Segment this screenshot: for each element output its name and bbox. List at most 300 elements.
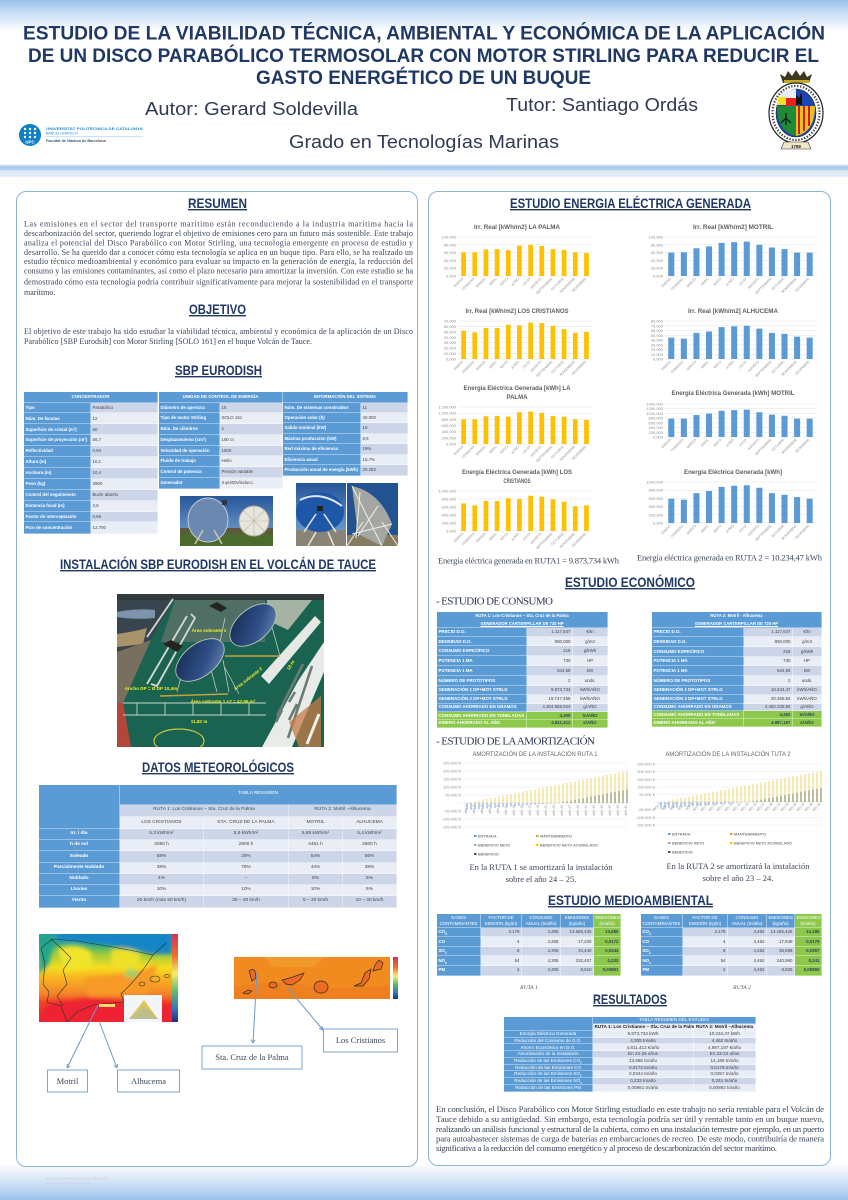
arrow: to Alhucema [98,1020,117,1068]
table: datos meteorologicos: STA. CRUZ DE LA PALMA [217,820,275,825]
arrow: to Los Cristianos [286,986,322,1030]
chart: Irr. Real Alhucema [650,308,816,378]
table: datos meteorologicos: 5% [366,876,373,881]
chart: Energia electrica Los Cristianos: ABRIL [488,531,497,541]
table: datos meteorologicos: 4% [158,876,165,881]
chart: amortizacion ruta 1: -150.000 € [441,824,461,829]
table: concentrador: 10,4 [92,470,101,475]
table: informacion del sistema: 11 [362,404,367,410]
chart: Energia electrica La Palma: 200,000 [441,435,456,440]
table: emisiones ruta 2: EMISIÓN (kg/tn) [689,920,721,926]
chart: amortizacion ruta 1: año 27 [568,804,572,815]
table: resumen de resultados: RUTA 2: Motril –Alhucema [696,1024,753,1029]
table: concentrador: 10,1 [92,459,101,464]
chart: Irr. Real Alhucema: OCTUBRE [770,359,785,374]
table: consumo ruta 2: kW [804,668,810,673]
table: resumen de resultados: Reducción del Consumo de D.O. [514,1038,582,1043]
chart: Energia electrica Motril: ABRIL [699,437,709,447]
chart: Irr. Real Alhucema: ABRIL [699,359,709,369]
chart: Energia electrica La Palma: ENERO [452,444,464,456]
text: conclusion: Tauce debido a su antigüedad. Sin embargo, esta tecnología podría ser útil y rentable tanto en un buque nuevo, [436,1114,824,1124]
chart: amortizacion ruta 2: -100.000 € [635,814,655,819]
table: emisiones ruta 2: 0,0357 [806,948,820,953]
table: consumo ruta 1: 2 [568,678,570,683]
table: datos meteorologicos: 4451 h [308,842,323,847]
chart: amortizacion ruta 2: año 21 [731,801,741,812]
table: emisiones ruta 2: 14.185,426 [771,929,792,934]
callout: Los Cristianos: Los Cristianos [335,1034,385,1044]
table: consumo ruta 1: kWh/AÑO [580,687,600,692]
chart: amortizacion ruta 1: año 33 [592,804,596,815]
table: emisiones ruta 2: EMISIONES [768,915,793,920]
chart: Irr. Real Los Cristianos: 60,000 [443,323,456,328]
table: concentrador: 0,96 [92,514,101,519]
chart: Irr. Real La Palma: ENERO [452,276,464,288]
table: emisiones ruta 2: PM [642,967,649,972]
callout: Alhucema: Alhucema [131,1076,166,1086]
table: datos meteorologicos: MOTRIL [306,820,325,825]
table: resumen de resultados: 0,0357 tn/año [710,1071,739,1076]
table: datos meteorologicos: 10% [241,887,251,892]
chart: Irr. Real Alhucema: ENERO [660,359,672,371]
table: consumo ruta 2: GENERADOR CARTERPILLAR DE 730 HP [695,621,778,626]
subheading: estudio de consumo: - ESTUDIO DE CONSUMO [436,595,553,607]
table: consumo ruta 2: tn/AÑO [799,712,815,717]
chart: Irr. Real Los Cristianos: 20,000 [443,345,456,350]
chart: Energia electrica Alhucema: ABRIL [699,523,709,533]
photo: blue dish front [296,482,346,546]
table: consumo ruta 1: €/tn [586,629,594,634]
chart: Energia electrica La Palma: 0,000 [445,441,456,446]
table: consumo ruta 2: unds. [802,678,812,683]
table: emisiones ruta 2: (tn/año) [800,920,816,926]
table: consumo ruta 2: 730 [783,658,790,663]
chart: Irr. Real Motril: MAYO [712,276,722,286]
text: resumen: demostrado cómo esta tecnología podría contribuir significativamente para mejorar la sostenibilidad en el transporte [24,277,413,286]
chart: amortizacion ruta 1: -100.000 € [441,816,461,821]
table: informacion del sistema [283,392,408,476]
chart: Irr. Real Motril: FEBRERO [670,276,684,291]
table: informacion del sistema: INFORMACIÓN DEL SISTEMA [314,394,376,399]
text: resumen: desarrollo. Se ha querido dar a conocer cómo esta tecnología se aplica en un buque tipo. Para ello, se ha realizado un [24,248,412,256]
chart: amortizacion ruta 1: BENEFICIO NETO ACUMULADO [540,843,598,847]
table: emisiones ruta 1: (kg/año) [569,920,585,926]
chart: amortizacion ruta 1: año 13 [512,804,516,815]
table: emisiones ruta 2: NOx [642,958,651,965]
table: concentrador: Altura (m) [26,459,46,464]
table: resumen de resultados: TABLA RESUMEN DEL ESTUDIO [639,1017,709,1022]
chart: Irr. Real Los Cristianos: 70,000 [443,318,456,323]
table: resumen de resultados: Amortización de la Instalación [517,1051,579,1056]
table: consumo ruta 2: 4,462 [780,712,790,717]
table: concentrador: CONCENTRADOR [72,394,109,399]
chart: amortizacion ruta 1: año 7 [488,804,492,813]
chart: Energia electrica La Palma: MARZO [475,444,486,456]
table: concentrador [24,392,158,534]
table: datos meteorologicos: – [245,876,247,881]
table: datos meteorologicos: 44% [311,865,320,870]
table: concentrador: 3960 [92,481,102,486]
table: emisiones ruta 1: SO2 [438,948,447,955]
chart: amortizacion ruta 1: año 25 [560,804,564,815]
icon: UPC logo: Facultat de Nàutica de Barcelona [46,139,107,143]
table: unidad de control de energia: 2 [222,426,224,431]
table: emisiones ruta 2: 0,0179 [806,939,820,944]
chart: Irr. Real Motril: 40,000 [650,257,663,262]
chart: Irr. Real La Palma: MARZO [475,276,486,288]
text: amortizacion ruta 2 [666,860,810,882]
author: Autor: Gerard Soldevilla [145,99,359,119]
table: emisiones ruta 1: EMISIONES [565,915,589,920]
table: emisiones ruta 1: 17,220 [578,939,592,944]
table: emisiones ruta 2: 0,241 [808,958,820,963]
table: consumo ruta 1: 850,000 [555,638,570,644]
chart: amortizacion ruta 1: año 1 [464,804,468,813]
table: datos meteorologicos: 5,88 kWh/m² [302,831,329,836]
chart: amortizacion ruta 2: año 11 [691,801,701,811]
map: Iberian peninsula irradiation [38,930,178,1022]
chart: Energia electrica Motril: NOVIEMBRE [780,437,798,455]
chart: Energia electrica Motril: 400,000 [648,425,663,430]
chart: Energia electrica Motril: AGOSTO [747,437,760,450]
chart: Irr. Real Alhucema: 60,000 [650,328,663,332]
table: consumo ruta 1: RUTA 1: Los Cristianos – Sta. Cruz de la Palma [475,613,569,618]
chart: Energia electrica La Palma: 600,000 [441,422,456,428]
text: objetivo [24,326,412,346]
table: datos meteorologicos: Lluvias [71,887,87,892]
heading: resultados: RESULTADOS [592,990,666,1006]
chart: Energia electrica Alhucema: NOVIEMBRE [780,523,798,541]
table: unidad de control de energia: Helio [222,458,232,463]
table: resumen de resultados: 4.811,412 €/año [627,1044,659,1050]
table: datos meteorologicos: TABLA RESUMEN [238,791,278,796]
chart: Energia electrica Motril: MARZO [685,437,697,449]
table: resumen de resultados: 4.987,197 €/año [708,1044,741,1050]
table: emisiones ruta 1: GASES [451,915,466,920]
table: consumo ruta 1: HP [587,658,593,663]
table: concentrador: Tipo [26,405,35,410]
chart: Irr. Real Motril: ABRIL [699,276,709,286]
chart: Irr. Real Alhucema: DICIEMBRE [794,359,810,376]
chart: Irr. Real La Palma: NOVIEMBRE [558,276,576,294]
table: consumo ruta 2: GENERACIÓN 1 DP+MOT STRLG [654,687,723,692]
text: resumen: analiza el potencial del Disco Parabólico con Motor Stirling, una tecnología emergente en proceso de estudio y [24,238,413,247]
table: datos meteorologicos: 10% [311,887,320,892]
table: unidad de control de energia: Control de potencia [160,469,202,474]
table: concentrador: Superficie de proyección (m²) [26,437,87,442]
table: consumo ruta 1: CONSUMO ESPECÍFICO [438,648,489,653]
table: informacion del sistema: 15,7% [362,457,375,462]
table: emisiones ruta 2: 4,462 [754,939,764,944]
chart: amortizacion ruta 1: año 19 [536,804,540,815]
table: datos meteorologicos: 3090 h [154,842,169,847]
table: emisiones ruta 2: 14,185 [806,929,820,934]
table: resumen de resultados: Reducción de las Emisiones PM [515,1085,581,1090]
heading: estudio medioambiental: ESTUDIO MEDIOAMBIENTAL [548,892,713,908]
chart: Energia electrica La Palma: 1.000,000 [438,410,456,415]
chart: Energia electrica Alhucema: FEBRERO [670,523,684,538]
table: concentrador: Superficie de cristal (m²) [26,427,77,432]
table: resumen de resultados: En 23-24 años [710,1051,739,1056]
chart: amortizacion ruta 2: año 15 [707,801,717,812]
photo: dish rear structure [346,482,398,546]
table: datos meteorologicos: 25% [241,854,251,859]
chart: Irr. Real Los Cristianos: ABRIL [488,359,497,369]
table: emisiones ruta 2: (kg/año) [772,920,789,926]
chart: Irr. Real Alhucema: NOVIEMBRE [780,359,798,377]
chart: Irr. Real Alhucema: JULIO [737,359,747,369]
table: consumo ruta 1: €/AÑO [583,720,597,725]
chart: Irr. Real La Palma: 40,000 [443,257,456,262]
table: consumo ruta 1: 218 [563,648,570,653]
table: emisiones ruta 1: EMISIONES [596,915,620,920]
table: emisiones ruta 1: PM [438,967,445,972]
chart: Energia electrica Motril: 200,000 [648,429,663,434]
image: dishes installed on ship deck: 18 m [285,659,295,670]
table: consumo ruta 2: RUTA 2: Motril - Alhucema [710,613,763,618]
table: consumo ruta 1: DINERO AHORRADO AL AÑO [438,720,500,725]
chart: Energia electrica La Palma: MAYO [499,444,509,454]
chart: Energia electrica Alhucema: SEPTIEMBRE [754,523,773,542]
chart: Energia electrica Los Cristianos [438,468,592,550]
table: consumo ruta 2: 4.462.228,92 [765,704,790,709]
table: emisiones ruta 2: 17,849 [779,939,792,944]
table: datos meteorologicos: 2600 h [362,842,377,847]
table: emisiones ruta 2: CONSUMO [736,915,758,920]
table: emisiones ruta 1 [437,914,621,976]
chart: Irr. Real Alhucema: 30,000 [650,342,663,347]
chart: amortizacion ruta 2: BENEFICIO NETO ACUMULADO [734,841,792,845]
callout: Alhucema [117,1070,179,1092]
chart: Energia electrica La Palma: SEPTIEMBRE [535,444,554,463]
table: resumen de resultados: 0,0172 tn/año [629,1065,657,1070]
text: resumen [24,219,413,296]
table: emisiones ruta 1: CO2 [438,929,447,936]
text: conclusion: para autoabastecer sistemas de carga de baterías en embarcaciones de recreo. De este modo, contribuiría de manera [436,1133,824,1143]
chart: amortizacion ruta 2: año 35 [787,801,797,812]
image: dishes installed on ship deck: Área sobrante 1 [191,626,226,632]
table: resumen de resultados: 0,233 tn/año [630,1078,656,1083]
table: consumo ruta 2: 4.987,197 [771,720,790,725]
chart: Energia electrica La Palma: 800,000 [441,416,456,421]
table: emisiones ruta 1: 0,0344 [605,948,618,953]
table: emisiones ruta 1: 54 [515,958,520,963]
table: resumen de resultados: 14,185 tn/año [710,1058,739,1063]
table: consumo ruta 2: POTENCIA 1 MA [654,658,688,663]
table: consumo ruta 1: kW [587,668,593,673]
table: unidad de control de energia: 15 [222,405,226,410]
table: emisiones ruta 2: 2 [723,967,726,972]
footer note: www.PosterPresentations.com [46,1182,92,1186]
chart: amortizacion ruta 1: año 9 [496,804,500,813]
table: emisiones ruta 1: 8 [517,948,520,953]
chart: Energia electrica Motril: FEBRERO [670,437,684,452]
table: consumo ruta 1: 9.873,734 [551,687,570,692]
table: unidad de control de energia: Desplazamiento (cm³) [160,437,206,442]
chart: Irr. Real Los Cristianos: 50,000 [443,329,456,334]
table: datos meteorologicos: 75% [241,865,251,870]
chart: amortizacion ruta 1: año 29 [576,804,580,815]
table: consumo ruta 2: GENERACIÓN 2 DP+MOT STRLG [654,696,723,701]
chart: Energia electrica Motril: 800,000 [648,415,663,420]
chart: Energia electrica Alhucema: DICIEMBRE [794,523,810,540]
table: datos meteorologicos: 10 – 30 km/h [356,898,383,903]
table: concentrador: Parabólico [92,405,113,410]
table: emisiones ruta 1: 34,440 [578,948,592,953]
chart: Irr. Real Alhucema: SEPTIEMBRE [754,359,773,378]
table: informacion del sistema: 20.252 [362,467,376,472]
table: consumo ruta 1: unds. [585,678,595,683]
chart: amortizacion ruta 2: año 9 [684,801,693,810]
table: emisiones ruta 1: 4 [517,939,520,944]
chart: Energia electrica La Palma: OCTUBRE [550,444,565,459]
chart: Energia electrica Alhucema: 800,000 [648,487,663,492]
chart: Irr. Real La Palma: SEPTIEMBRE [535,276,554,295]
caption: ruta 2: RUTA 2 [732,984,751,990]
table: consumo ruta 2: CONSUMO AHORRADO EN GRAMOS [654,704,732,709]
table: unidad de control de energia: 3 φ/400v/inducc. [222,480,254,485]
chart: amortizacion ruta 1: MANTENIMIENTO [540,834,572,838]
table: datos meteorologicos: Nublado [69,876,89,881]
chart: Irr. Real Los Cristianos: Irr. Real [kWh/m2] LOS CRISTIANOS [465,308,569,314]
table: datos meteorologicos: h de sol [70,842,88,847]
table: consumo ruta 1: tn/AÑO [582,713,598,718]
table: concentrador: 56,7 [92,437,101,442]
chart: amortizacion ruta 1: año 41 [624,804,628,815]
text: resumen: descarbonización del sector, queriendo lograr el objetivo de emisiones cero para un futuro más sostenible. Este trabajo [24,228,412,238]
map: Canary Islands irradiation [234,956,398,998]
chart: Energia electrica Los Cristianos: 800,000 [441,496,456,501]
panel: left column [16,191,418,1167]
table: emisiones ruta 2: CONTAMINANTES [643,920,680,926]
chart: Irr. Real Motril: SEPTIEMBRE [754,276,773,295]
icon: UPC logo: UNIVERSITAT POLITÈCNICA DE CATALUNYA [46,126,143,131]
chart: Energia electrica Motril [646,390,816,456]
text: conclusion: realizando un análisis funcional y estructural de la cubierta, como en una instalación terrestre por ejemplo, en un puerto [436,1124,824,1134]
chart: Energia electrica Alhucema: 200,000 [648,512,663,517]
table: datos meteorologicos: 30 – 40 km/h [232,898,260,903]
chart: Irr. Real Los Cristianos: ENERO [452,359,464,371]
table: concentrador: Control del seguimiento [26,492,76,497]
chart: amortizacion ruta 1: año 5 [480,804,484,813]
chart: Irr. Real Los Cristianos: 30,000 [443,340,456,345]
chart: Irr. Real Los Cristianos: MARZO [475,359,486,371]
chart: amortizacion ruta 1: año 39 [616,804,620,815]
chart: Energia electrica Los Cristianos: 0,000 [445,528,456,533]
footer note: PRINCIPAL PRESENTATION TEMPLATE [46,1177,110,1181]
chart: Irr. Real Motril [648,224,816,295]
table: concentrador: Peso (kg) [26,481,45,486]
chart: Irr. Real Motril: 80,000 [650,242,663,247]
chart: Energia electrica Motril: ENERO [660,437,672,449]
image: dishes installed on ship deck: Ancho DP = Ø DP 10,4m [124,686,177,690]
chart: Energia electrica Alhucema: ENERO [660,523,672,535]
heading: resumen: RESUMEN [188,194,246,210]
chart: Energia electrica Los Cristianos: DICIEMBRE [570,531,587,548]
table: emisiones ruta 1: ANUAL (tn/año) [526,920,556,926]
chart: Irr. Real Motril: NOVIEMBRE [780,276,798,294]
chart: Energia electrica Motril: 1400,000 [646,401,663,406]
table: unidad de control de energia: SOLO 161 [222,415,242,420]
table: consumo ruta 1: kWh/AÑO [580,696,600,701]
table: datos meteorologicos: Viento [72,898,86,903]
table: resumen de resultados: En 24-25 años [628,1051,658,1056]
chart: Irr. Real Los Cristianos: MAYO [499,359,509,369]
table: unidad de control de energia: 1500 [222,448,231,453]
table: emisiones ruta 1: 13,685 [605,929,618,934]
chart: Energia electrica La Palma: JULIO [521,444,531,454]
chart: Irr. Real La Palma: MAYO [499,276,509,286]
chart: Energia electrica La Palma: NOVIEMBRE [558,444,576,462]
table: emisiones ruta 2: 35,698 [779,948,792,953]
table: informacion del sistema: Red máxima de eficiencia [284,446,338,451]
table: emisiones ruta 1: 4,305 [548,948,558,953]
chart: Energia electrica Los Cristianos: SEPTIEMBRE [535,531,554,550]
chart: Energia electrica Motril: 600,000 [648,420,663,425]
chart: Irr. Real Los Cristianos: 40,000 [443,334,456,339]
table: consumo ruta 1: 1.117,647 [551,629,570,634]
chart: amortizacion ruta 2: año 13 [699,801,709,812]
title [23,20,825,89]
chart: Irr. Real Los Cristianos: FEBRERO [461,359,475,374]
table: emisiones ruta 2: 54 [721,958,726,963]
chart: amortizacion ruta 2: año 19 [723,801,733,812]
table: informacion del sistema: 8,5 [362,436,369,441]
table: concentrador: 0,94 [92,448,101,453]
chart: Energia electrica Alhucema: JULIO [737,523,747,533]
table: emisiones ruta 1: NOx [438,958,447,965]
chart: Energia electrica Los Cristianos: 600,000 [441,504,456,509]
table: consumo ruta 1: POTENCIA 1 MA [438,668,473,673]
table: consumo ruta 2: 1.117,647 [771,629,790,634]
text: objetivo: El objetivo de este trabajo ha sido estudiar la viabilidad técnica, ambiental y económica de la aplicación de un Disco [24,326,412,336]
table: resumen de resultados: Ahorro Económico en D.O. [521,1044,575,1050]
chart: amortizacion ruta 2: año 27 [755,801,765,812]
table: emisiones ruta 1: EMISIÓN (kg/tn) [485,920,517,926]
table: emisiones ruta 1: CONTAMINANTES [440,920,477,926]
icon: UPC logo [19,124,143,146]
table: consumo ruta 1: 544,58 [557,668,570,673]
table: informacion del sistema: Producción anual de energía (kWh) [284,467,358,472]
table: consumo ruta 2: 10.234,47 [771,687,790,692]
table: unidad de control de energia: Núm. De cilindros [160,426,198,431]
table: unidad de control de energia: UNIDAD DE CONTROL DE ENERGÍA [183,394,258,399]
chart: Irr. Real Los Cristianos: 10,000 [443,351,456,356]
chart: Energia electrica Los Cristianos: FEBRERO [461,531,475,546]
chart: Irr. Real Alhucema: 70,000 [650,323,663,328]
text: objetivo: Parabólico [SBP Eurodsih] con Motor Stirling [SOLO 161] en el buque Volcán de Tauce. [24,336,312,346]
chart: Energia electrica Los Cristianos: JUNIO [510,531,520,541]
chart: Irr. Real Alhucema: AGOSTO [747,359,760,372]
chart: Irr. Real Motril: 20,000 [650,265,663,270]
chart: amortizacion ruta 2: -50.000 € [638,807,655,812]
chart: Irr. Real Los Cristianos [443,308,592,378]
chart: Energia electrica Alhucema: MAYO [712,523,722,533]
chart: Irr. Real Motril: MARZO [685,276,697,288]
text: conclusion [436,1104,824,1152]
title: ESTUDIO DE LA VIABILIDAD TÉCNICA, AMBIENTAL Y ECONÓMICA DE LA APLICACIÓN [23,20,825,44]
table: unidad de control de energia: Fluido de trabajo [160,458,196,463]
chart: Energia electrica Motril: SEPTIEMBRE [754,437,773,456]
chart: amortizacion ruta 2: año 37 [795,801,805,812]
chart: amortizacion ruta 2: año 39 [803,801,813,812]
heading: objetivo: OBJETIVO [188,300,246,316]
table: consumo ruta 1: g/kWh [584,648,596,653]
chart: Energia electrica Alhucema: 1000,000 [646,479,663,484]
chart: amortizacion ruta 2: 150.000 € [637,776,655,781]
caption: ruta 1: RUTA 1 [519,984,538,990]
chart: amortizacion ruta 2: año 29 [763,801,773,812]
